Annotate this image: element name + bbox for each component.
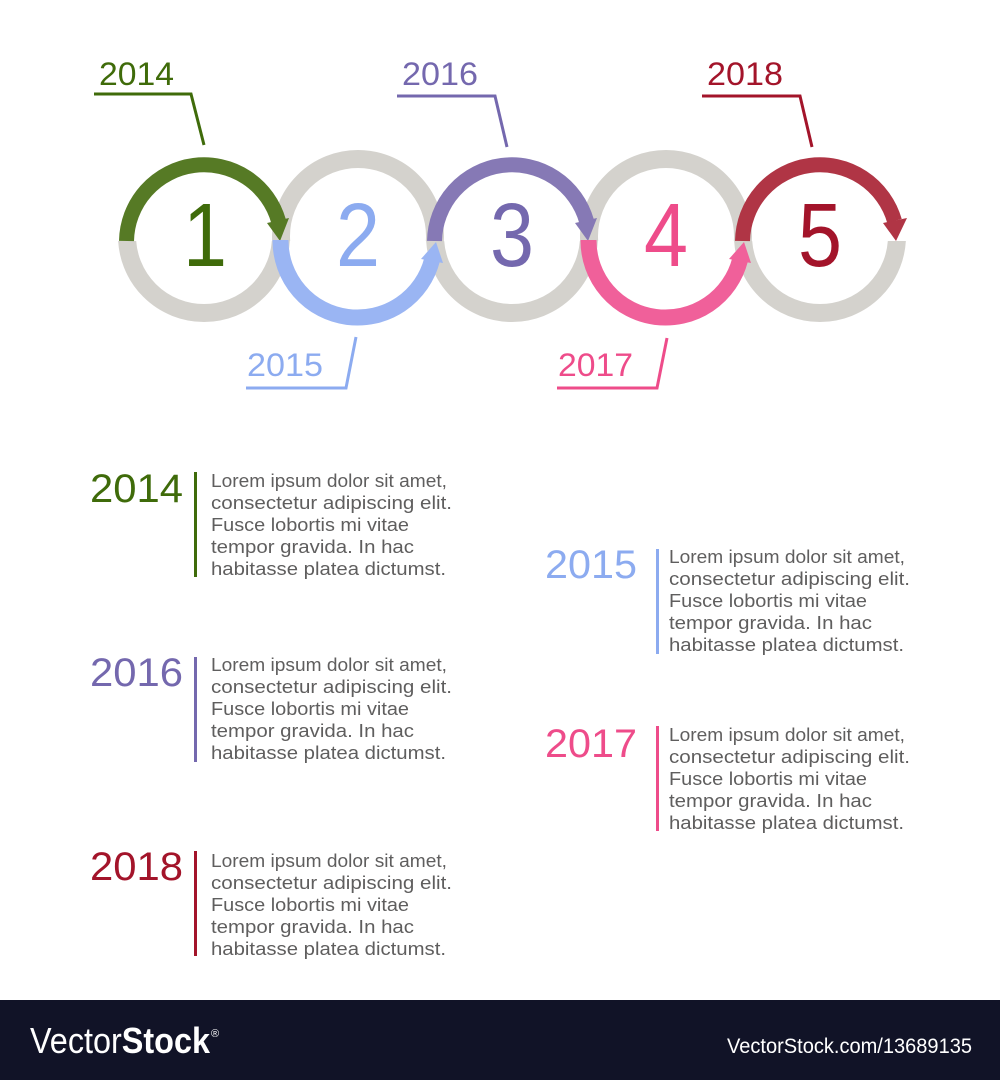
callout 2018: 2018 [707,56,783,92]
text block 2014: 2014 [90,467,183,511]
text block 2015 [545,543,910,655]
callout 2015 [246,337,356,388]
text block 2015: Lorem ipsum dolor sit amet, [669,547,905,567]
text block 2016: Lorem ipsum dolor sit amet, [211,655,447,675]
step numbers: 3 [490,186,534,286]
text block 2018: 2018 [90,845,183,889]
arrow 2 [280,240,443,318]
step numbers: 1 [183,186,227,286]
callout 2014 [94,56,204,145]
text block 2014: tempor gravida. In hac [211,537,414,557]
callout 2017: 2017 [558,347,633,383]
text block 2015: tempor gravida. In hac [669,613,872,633]
text block 2016: 2016 [90,651,183,695]
text block 2017: consectetur adipiscing elit. [669,747,910,767]
text block 2016: Fusce lobortis mi vitae [211,699,409,719]
text block 2018: Fusce lobortis mi vitae [211,895,409,915]
text block 2018: Lorem ipsum dolor sit amet, [211,851,447,871]
text block 2016: consectetur adipiscing elit. [211,677,452,697]
callout 2016 [397,56,507,147]
text block 2018: habitasse platea dictumst. [211,939,446,959]
callout 2016: 2016 [402,56,478,92]
arrow 4 [588,240,751,318]
text block 2017: Fusce lobortis mi vitae [669,769,867,789]
registered mark: ® [211,1028,219,1040]
text block 2018: consectetur adipiscing elit. [211,873,452,893]
arrow 5 [742,165,907,241]
text block 2015: consectetur adipiscing elit. [669,569,910,589]
text block 2018 [90,845,452,959]
step numbers: 4 [644,186,688,286]
callout 2015: 2015 [247,347,323,383]
gray rings [127,159,897,313]
text block 2016: tempor gravida. In hac [211,721,414,741]
text block 2017 [545,722,910,833]
callout 2014: 2014 [99,56,174,92]
step numbers: 2 [336,186,380,286]
step numbers: 5 [798,186,842,286]
footer logo: VectorStock [30,1020,211,1061]
text block 2014 [90,467,452,579]
text block 2015: 2015 [545,543,637,587]
footer image id: VectorStock.com/13689135 [727,1035,972,1058]
text block 2015: Fusce lobortis mi vitae [669,591,867,611]
text block 2017: 2017 [545,722,637,766]
text block 2014: habitasse platea dictumst. [211,559,446,579]
callout 2018 [702,56,812,147]
text block 2017: Lorem ipsum dolor sit amet, [669,725,905,745]
text block 2018: tempor gravida. In hac [211,917,414,937]
arrow 3 [434,165,597,241]
arrow 1 [126,165,289,241]
step numbers [183,186,842,286]
text block 2015: habitasse platea dictumst. [669,635,904,655]
footer bar [0,1000,1000,1080]
text block 2016: habitasse platea dictumst. [211,743,446,763]
text block 2014: Lorem ipsum dolor sit amet, [211,471,447,491]
text block 2017: tempor gravida. In hac [669,791,872,811]
callout 2017 [557,338,667,388]
text block 2014: Fusce lobortis mi vitae [211,515,409,535]
text block 2014: consectetur adipiscing elit. [211,493,452,513]
text block 2016 [90,651,452,763]
text block 2017: habitasse platea dictumst. [669,813,904,833]
